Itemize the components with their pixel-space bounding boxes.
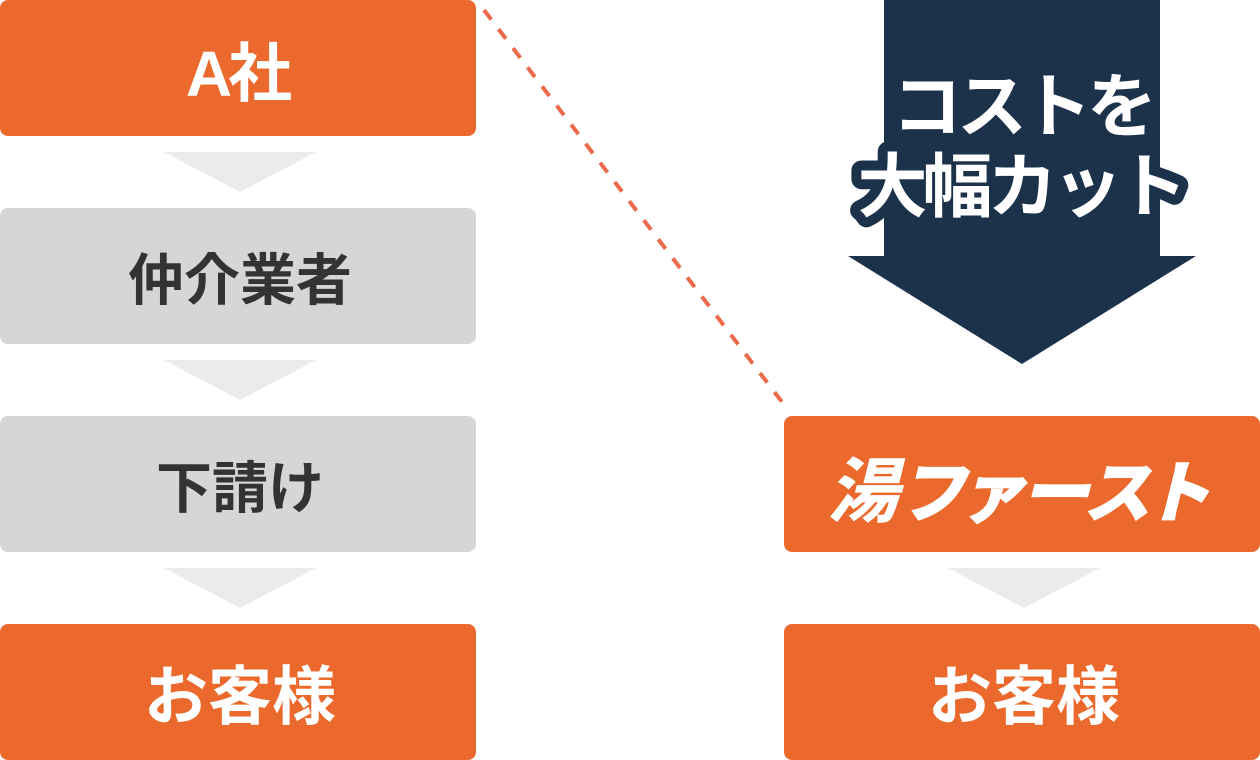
label: コストを大幅カット: 大幅カット — [858, 148, 1182, 226]
box: 湯ファースト: ァ — [955, 457, 1040, 531]
label: コストを大幅カット: 大幅カット — [858, 148, 1182, 226]
arrow: 仲介業者 to 下請け — [164, 360, 316, 400]
arrow: 下請け to お客様 — [164, 568, 316, 608]
box: 下請け — [0, 416, 476, 552]
box: お客様 (right): お客様 — [928, 661, 1120, 733]
box: お客様 (left) — [0, 624, 476, 760]
label: コストを大幅カット — [858, 68, 1182, 226]
label: コストを大幅カット: コストを — [892, 68, 1152, 146]
box: 湯ファースト: フ — [895, 457, 980, 531]
box: 湯ファースト: ト — [1140, 457, 1225, 531]
box: A社 — [0, 0, 476, 136]
box: A社: A社 — [186, 38, 291, 110]
box: 湯ファースト: ス — [1080, 457, 1165, 531]
box: お客様 (right) — [784, 624, 1260, 760]
box: 仲介業者: 仲介業者 — [128, 249, 352, 312]
box: 湯ファースト: 湯 — [824, 454, 913, 532]
arrow: A社 to 仲介業者 — [164, 152, 316, 192]
box: 下請け: 下請け — [156, 457, 324, 520]
box: お客様 (left): お客様 — [144, 661, 336, 733]
box: 仲介業者 — [0, 208, 476, 344]
arrow: 湯ファースト to お客様 — [948, 568, 1100, 608]
arrow: cost cut — [848, 0, 1196, 364]
box: 湯ファースト — [784, 416, 1260, 552]
dashed connector line — [484, 10, 782, 402]
box: 湯ファースト: ー — [1018, 457, 1103, 531]
